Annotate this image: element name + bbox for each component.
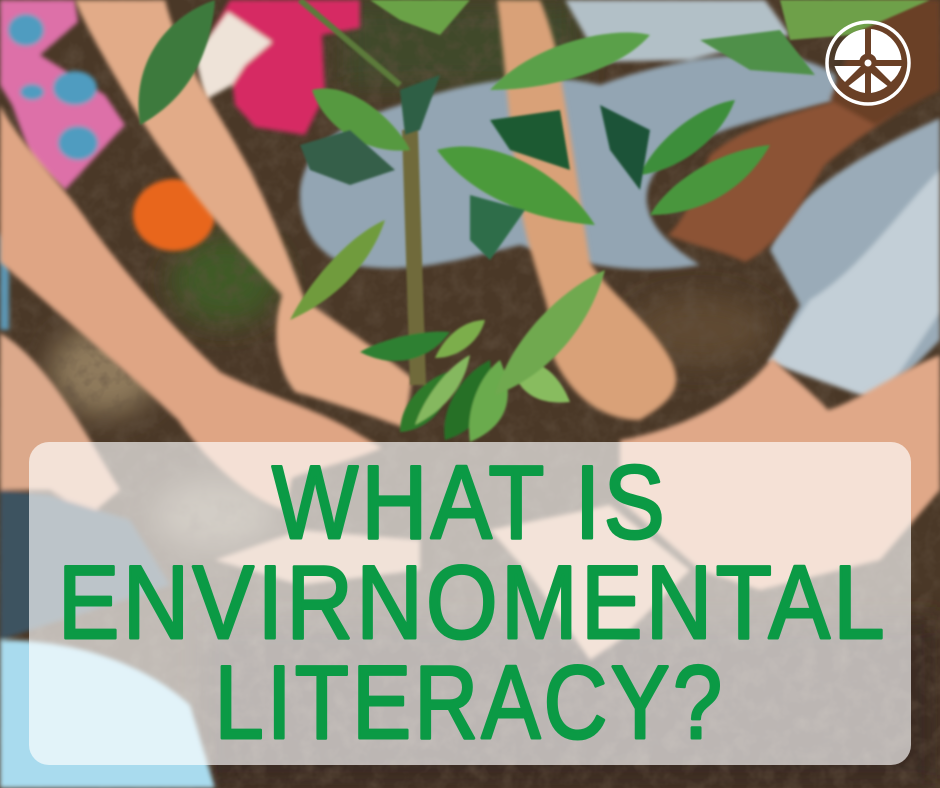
title panel xyxy=(29,442,911,765)
grey-blue trousers and sleeve xyxy=(0,0,940,402)
title line: ENVIRONMENTAL: ENVIRNOMENTAL xyxy=(58,544,888,660)
title line: LITERACY?: LITERACY? xyxy=(215,645,725,761)
tree sapling with leaves xyxy=(138,0,930,442)
title line: WHAT IS: WHAT IS xyxy=(272,443,668,560)
pink patterned clothing and boot xyxy=(0,0,360,190)
orange fruit xyxy=(133,179,215,251)
